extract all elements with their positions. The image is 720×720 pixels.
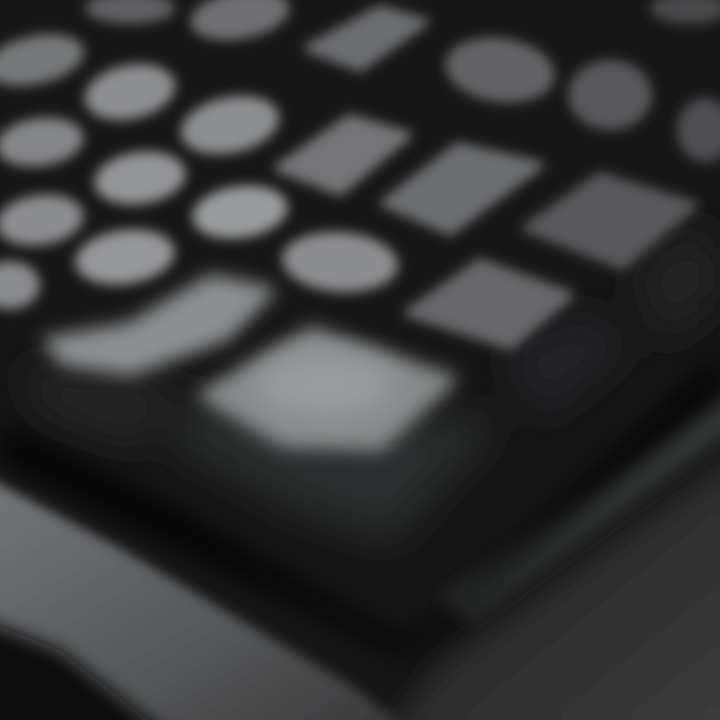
dark shadow corner, bottom left bbox=[0, 615, 180, 720]
large key bbox=[205, 332, 450, 445]
key sides bbox=[20, 220, 720, 540]
row keys bbox=[0, 0, 720, 346]
long key bbox=[50, 280, 268, 370]
desk surface, lower left bbox=[0, 468, 430, 720]
keyboard body shadow bbox=[0, 355, 720, 655]
large key highlight bbox=[255, 353, 395, 417]
keyboard edge highlight bbox=[440, 385, 720, 620]
key tops bbox=[0, 0, 720, 445]
surface, lower right bbox=[380, 450, 720, 720]
